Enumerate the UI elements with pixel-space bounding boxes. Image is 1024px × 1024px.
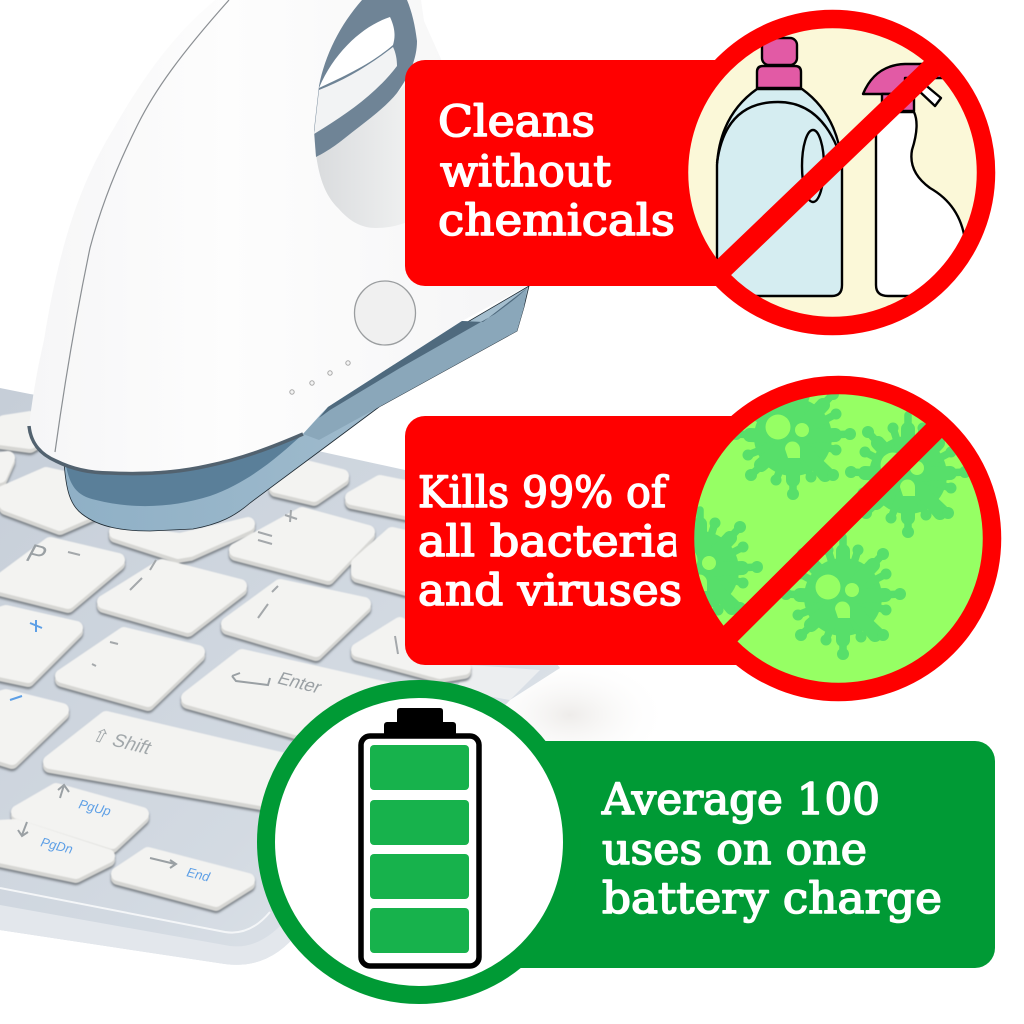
key labels: ⇧ Shift [88, 726, 156, 759]
keyboard photo [0, 388, 670, 965]
label text: and viruses [418, 566, 682, 616]
green label box [500, 741, 995, 968]
label text: uses on one [602, 825, 867, 875]
icon: full battery [266, 689, 572, 995]
panel: cleans without chemicals [405, 19, 986, 326]
label text: Cleans [438, 97, 595, 147]
power button [354, 281, 416, 345]
panel: battery uses [266, 689, 995, 995]
key labels: P [21, 538, 52, 570]
label text: Kills 99% of [418, 468, 669, 518]
keyboard keys [0, 418, 464, 900]
icon: crossed out viruses [637, 377, 992, 692]
label text: battery charge [602, 874, 942, 924]
label text: all bacteria [418, 517, 683, 567]
key labels [10, 510, 398, 885]
label text: Average 100 [601, 775, 880, 825]
label text: without [440, 147, 611, 197]
device body [29, 0, 527, 472]
indicator dots [290, 361, 350, 394]
panel: kills bacteria and viruses [405, 377, 992, 692]
device: keyboard cleaner [29, 0, 529, 531]
handle shadow [314, 70, 420, 228]
label text [438, 97, 675, 246]
device rim [29, 426, 303, 474]
red label box [405, 60, 760, 286]
device base [64, 286, 529, 531]
key labels: End [185, 864, 212, 885]
label text [418, 468, 683, 616]
red label box [405, 416, 770, 665]
key labels: PgUp [77, 796, 112, 819]
label text [601, 775, 942, 924]
handle ring [314, 0, 417, 157]
label text: chemicals [438, 196, 675, 246]
key labels: Enter [274, 668, 326, 697]
key labels: PgDn [39, 834, 74, 857]
icon: crossed out cleaning bottles [679, 19, 986, 326]
